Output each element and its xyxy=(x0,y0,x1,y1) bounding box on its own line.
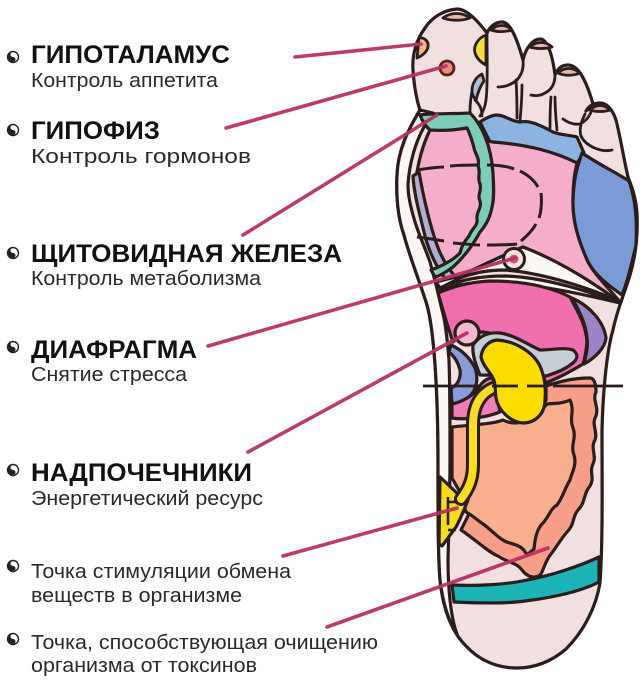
label: adrenals xyxy=(8,459,263,510)
toenails xyxy=(443,14,610,112)
arch lower band xyxy=(438,276,620,303)
big toe points xyxy=(417,35,486,100)
outer colon xyxy=(461,378,597,577)
teal lung band xyxy=(420,113,494,277)
yellow ureter xyxy=(461,387,496,499)
label: hypothalamus: ГИПОТАЛАМУС xyxy=(31,41,230,69)
label: pituitary: ГИПОФИЗ xyxy=(31,117,160,145)
label: diaphragm xyxy=(8,336,197,386)
label: adrenals: Энергетический ресурс xyxy=(31,488,263,510)
dark blue side zone xyxy=(573,153,636,295)
waist horizontal line xyxy=(423,385,623,387)
label: adrenals: НАДПОЧЕЧНИКИ xyxy=(31,459,252,487)
bullet icon xyxy=(8,560,18,572)
purple crescent xyxy=(572,298,606,364)
label: pituitary: Контроль гормонов xyxy=(31,146,251,168)
thyroid point xyxy=(504,248,524,270)
label: hypothalamus xyxy=(8,41,230,92)
arch white zone xyxy=(436,247,620,302)
label: metabolism point xyxy=(8,560,292,607)
label: metabolism point: веществ в организме xyxy=(31,585,242,607)
pink wedge below C xyxy=(452,378,500,419)
inner colon xyxy=(452,400,575,555)
label: thyroid: Контроль метаболизма xyxy=(31,268,262,290)
label: diaphragm: ДИАФРАГМА xyxy=(31,336,197,364)
grey zone xyxy=(473,333,577,376)
label: detox point: Точка, способствующая очищению xyxy=(31,632,378,654)
bullet icon xyxy=(8,634,18,644)
yellow bladder xyxy=(439,477,468,546)
dashed lung lines xyxy=(417,165,541,245)
label: detox point: организма от токсинов xyxy=(31,655,257,677)
magenta zone xyxy=(438,281,587,383)
label: detox point xyxy=(8,632,378,677)
label: pituitary xyxy=(8,117,251,168)
adrenal point xyxy=(455,321,479,345)
bullet icon xyxy=(8,248,18,258)
label: thyroid: ЩИТОВИДНАЯ ЖЕЛЕЗА xyxy=(31,240,342,268)
white arch strip xyxy=(397,110,457,634)
bullet icon xyxy=(8,342,18,352)
bladder dashed lines xyxy=(448,497,456,530)
teal heel band xyxy=(452,557,599,603)
lavender strip xyxy=(413,172,461,288)
foot silhouette xyxy=(397,9,637,668)
label: diaphragm: Снятие стресса xyxy=(31,364,188,386)
label: thyroid xyxy=(8,240,342,290)
blue ball zone xyxy=(480,115,584,163)
bullet icon xyxy=(8,124,18,136)
pink lung zone xyxy=(417,128,620,302)
label: metabolism point: Точка стимуляции обмена xyxy=(31,561,292,583)
blue C zone xyxy=(449,345,477,404)
yellow kidney xyxy=(481,340,545,423)
label: hypothalamus: Контроль аппетита xyxy=(31,70,219,92)
foot illustration xyxy=(397,9,637,668)
toe lines xyxy=(470,33,612,151)
pointer lines xyxy=(208,44,548,627)
bullet icon xyxy=(8,464,18,476)
bullet icon xyxy=(8,52,18,62)
